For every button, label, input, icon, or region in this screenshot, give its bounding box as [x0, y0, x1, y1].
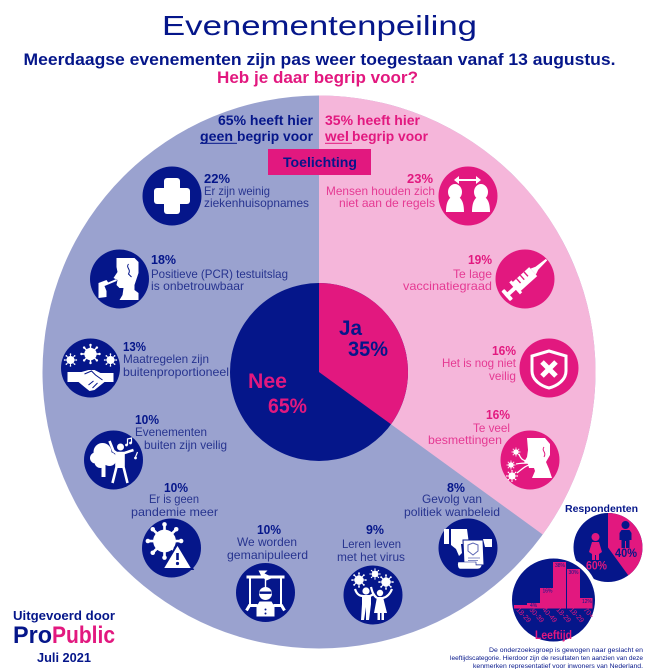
- text: 10% pandemie: pandemie meer: [131, 505, 218, 519]
- text: 16% veilig: veilig: [489, 369, 516, 383]
- icon: thumbs down and document: [438, 518, 498, 578]
- inner pie chart: Nee 65% / Ja 35%: 35%: [348, 338, 388, 361]
- gender pie chart: [574, 513, 643, 582]
- label: 60%: 60%: [586, 560, 607, 572]
- publisher credit: ProPublic: Pro: [13, 622, 52, 649]
- footnote: [450, 648, 644, 669]
- text: 16% veilig: 16%: [492, 344, 516, 358]
- text: 10% gemanipuleerd: 10%: [257, 523, 281, 537]
- text: 13%: buitenproportioneel: [123, 365, 229, 379]
- chart label: Leeftijd: [535, 630, 572, 642]
- text: 23%: 23%: [407, 172, 433, 186]
- bar values: [517, 563, 593, 609]
- icon: handshake and viruses: [61, 338, 120, 398]
- text: 13%: Maatregelen zijn: [123, 352, 209, 366]
- publisher credit: ProPublic: Public: [52, 622, 115, 649]
- text: 23%: niet aan de regels: [339, 196, 435, 210]
- heading: 65% no understanding: begrip voor: [237, 128, 314, 144]
- text: 18%: [151, 253, 288, 293]
- icon: dancing person and tree: [84, 430, 143, 490]
- heading: 35% understanding: wel: [324, 128, 349, 144]
- icon: virus with warning triangle: [142, 518, 201, 578]
- text: 16% besmettingen: [428, 408, 510, 447]
- text: 9%: 9%: [366, 523, 384, 537]
- text: 10% pandemie: [131, 481, 218, 519]
- text: 16% veilig: Het is nog niet: [442, 356, 517, 370]
- text: 19%: Te lage: [453, 267, 492, 281]
- inner pie chart: Nee 65% / Ja 35%: [230, 283, 408, 461]
- publisher credit: ProPublic: Juli 2021: [37, 651, 91, 665]
- text: 22%: Er zijn weinig: [204, 184, 270, 198]
- age categories: 18-29: [555, 607, 572, 625]
- text: 19%: 19%: [468, 253, 492, 267]
- icon: medical cross: [142, 166, 202, 226]
- publisher credit: ProPublic: Uitgevoerd door: [13, 609, 115, 623]
- outer pie chart: [42, 96, 596, 648]
- age categories: 70+: [582, 607, 595, 620]
- text: 16% besmettingen: Te veel: [473, 421, 510, 435]
- text: 10% gemanipuleerd: We worden: [237, 535, 297, 549]
- text: 10% gemanipuleerd: [227, 523, 308, 562]
- age categories: 18-29: [568, 607, 585, 625]
- icon: puppet on strings: [236, 563, 295, 622]
- text: 8%: 8%: [447, 481, 465, 495]
- text: 13%: 13%: [123, 340, 146, 354]
- heading: 65% no understanding: [200, 112, 314, 144]
- text: 18%: 18%: [151, 253, 176, 267]
- text: 8%: Gevolg van: [422, 492, 482, 506]
- text: 8%: [404, 481, 500, 519]
- text: 23%: Mensen houden zich: [326, 184, 435, 198]
- text: 10% evenementen: [135, 413, 227, 452]
- text: 19%: [403, 253, 492, 293]
- text: 10% pandemie: 10%: [164, 481, 188, 495]
- text: 16% besmettingen: 16%: [486, 408, 510, 422]
- bar values: 2%: [517, 600, 525, 606]
- text: 9%: Leren leven: [342, 537, 401, 551]
- text: 18%: Positieve (PCR) testuitslag: [151, 267, 288, 281]
- subtitle question: Heb je daar begrip voor?: [217, 69, 418, 87]
- text: 18%: is onbetrouwbaar: [151, 279, 244, 293]
- text: 10% gemanipuleerd: gemanipuleerd: [227, 548, 308, 562]
- text: 10% evenementen: Evenementen: [135, 425, 207, 439]
- text: 23%: [326, 172, 435, 210]
- title: Evenementenpeiling: [162, 10, 477, 41]
- heading: 35% understanding: 35% heeft hier: [325, 112, 421, 128]
- subtitle question: [24, 51, 616, 87]
- text: 16% besmettingen: besmettingen: [428, 433, 502, 447]
- inner pie chart: Nee 65% / Ja 35%: Nee: [248, 370, 287, 393]
- age categories: 40-49: [541, 607, 558, 625]
- text: 10% pandemie: Er is geen: [149, 492, 199, 506]
- text: 8%: politiek wanbeleid: [404, 505, 500, 519]
- text: 22%: 22%: [204, 172, 230, 186]
- text: 22%: [204, 172, 309, 210]
- heading: 65% no understanding: 65% heeft hier: [218, 112, 314, 128]
- heading: 65% no understanding: geen: [200, 128, 233, 144]
- icon: PCR test person: [90, 250, 149, 308]
- icon: two people keeping distance: [438, 166, 498, 226]
- bar values: 12%: [582, 599, 593, 605]
- text: 9%: met het virus: [337, 550, 405, 564]
- icon: shield with cross: [520, 338, 578, 398]
- toelichting label: Toelichting: [283, 154, 357, 170]
- age categories: [515, 607, 595, 625]
- inner pie chart: Nee 65% / Ja 35%: 65%: [268, 395, 307, 418]
- text: 13%: [123, 340, 229, 379]
- heading: respondenten: Respondenten: [565, 503, 638, 515]
- age categories: 30-39: [528, 607, 545, 625]
- bar values: 30%: [568, 570, 579, 576]
- toelichting label: [268, 149, 371, 175]
- icon: people with viruses: [344, 566, 402, 624]
- heading: 35% understanding: [324, 112, 429, 144]
- text: 22%: ziekenhuisopnames: [204, 196, 309, 210]
- footnote: De onderzoeksgroep is gewogen naar geslacht en: [489, 648, 643, 654]
- bar values: 4%: [530, 603, 538, 609]
- heading: 35% understanding: begrip voor: [352, 128, 429, 144]
- label: 40%: 40%: [615, 548, 637, 560]
- icon: sneezing person: [500, 430, 560, 490]
- subtitle question: Meerdaagse evenementen zijn pas weer toegestaan vanaf 13 augustus.: [24, 51, 616, 69]
- icon: woman: [589, 533, 602, 560]
- bars: [514, 562, 592, 608]
- publisher credit: ProPublic: [13, 609, 115, 665]
- bar values: 38%: [555, 563, 566, 569]
- age bar chart: [510, 556, 597, 644]
- text: 10% evenementen: buiten zijn veilig: [144, 438, 227, 452]
- bar values: 16%: [542, 588, 553, 594]
- text: 19%: vaccinatiegraad: [403, 279, 492, 293]
- icon: man: [620, 521, 632, 548]
- icon: syringe: [496, 250, 554, 308]
- text: 10% evenementen: 10%: [135, 413, 159, 427]
- text: 16% veilig: [442, 344, 517, 383]
- age categories: 18-29: [515, 607, 532, 625]
- inner pie chart: Nee 65% / Ja 35%: Ja: [339, 317, 362, 340]
- footnote: leeftijdscategorie. Hierdoor zijn de resultaten ten aanzien van deze: [450, 656, 644, 662]
- text: 9%: [337, 523, 405, 564]
